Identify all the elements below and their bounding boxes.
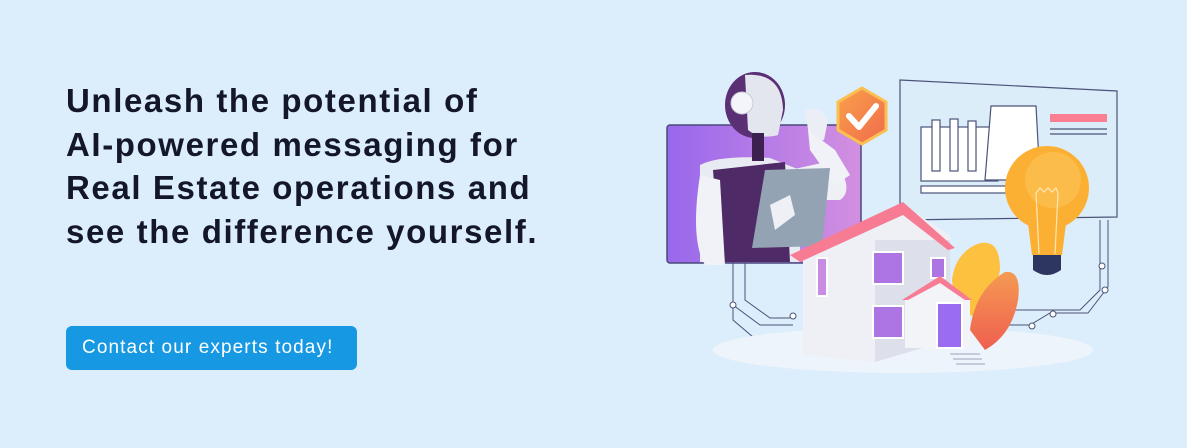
leaves (952, 243, 1019, 350)
circuit lines (730, 220, 1108, 343)
button: Contact our experts today! (82, 337, 333, 358)
tablet (752, 168, 830, 248)
lightbulb (1005, 146, 1089, 275)
title: Real Estate operations and (66, 169, 531, 206)
title: see the difference yourself. (66, 212, 538, 250)
title (66, 82, 538, 250)
ground shadow (713, 327, 1093, 373)
purple screen (667, 125, 861, 263)
chart board (900, 80, 1117, 220)
check badge (838, 88, 886, 144)
title: AI-powered messaging for (66, 126, 519, 162)
robot (696, 72, 850, 265)
house (790, 202, 985, 364)
button (66, 326, 357, 370)
title: Unleash the potential of (66, 82, 478, 119)
